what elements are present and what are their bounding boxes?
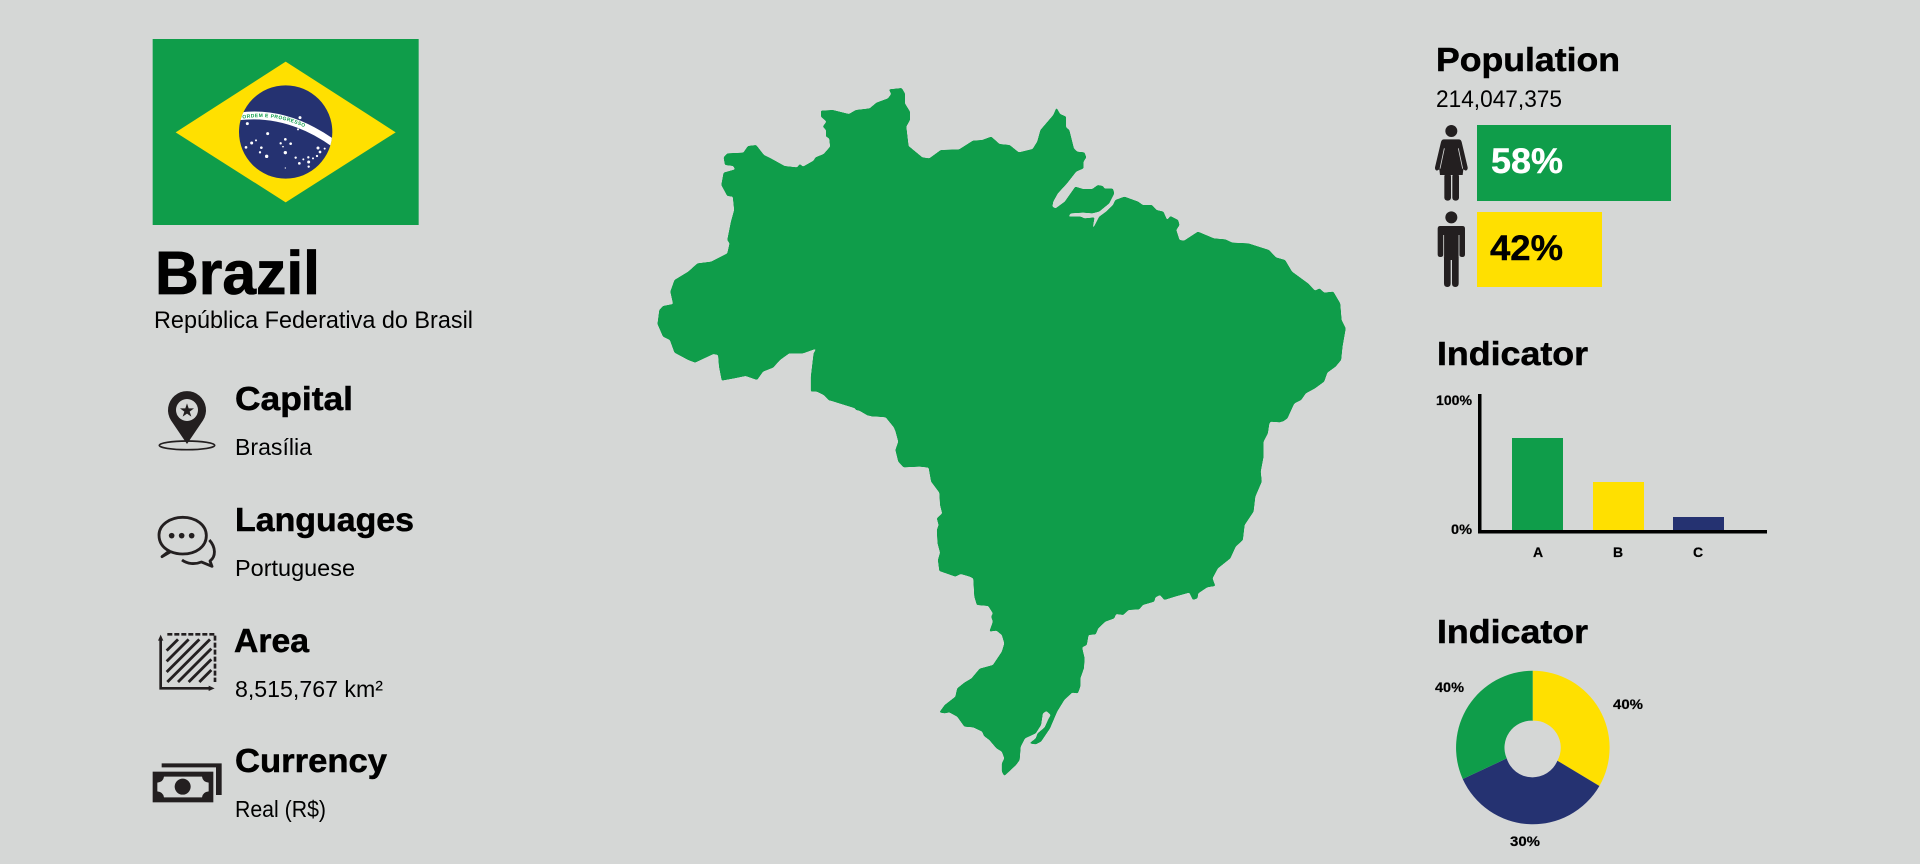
flag of Brazil [152, 39, 419, 225]
area label: Area [234, 622, 310, 659]
bar chart: C [1693, 544, 1703, 560]
donut chart: 40% [1613, 696, 1644, 712]
bar chart [1436, 392, 1767, 560]
area value: 8,515,767 km² [235, 676, 383, 702]
capital label: Capital [235, 380, 353, 417]
panel: bar chart indicator [1436, 335, 1767, 560]
population heading: Population [1436, 41, 1620, 78]
capital value: Brasília [235, 434, 312, 460]
icon: map pin [159, 391, 215, 450]
panel: donut chart indicator [1435, 613, 1644, 849]
population value: 214,047,375 [1436, 86, 1562, 113]
currency value: Real (R$) [235, 796, 326, 822]
bar: male share: 42% [1490, 229, 1563, 268]
bar: female share: 58% [1491, 142, 1563, 181]
bar chart: 100% [1436, 392, 1473, 408]
panel: country profile [152, 39, 473, 822]
donut chart: 30% [1510, 833, 1541, 849]
bar: female share [1477, 125, 1671, 201]
flag of Brazil: ORDEM E PROGRESSO [242, 114, 305, 127]
currency label: Currency [235, 742, 388, 779]
bar chart: A [1533, 544, 1543, 560]
icon: male figure [1438, 211, 1465, 287]
bar chart: B [1613, 544, 1623, 560]
bar chart: 0% [1451, 521, 1473, 537]
donut chart heading: Indicator [1437, 613, 1588, 650]
subtitle: República Federativa do Brasil [154, 307, 473, 334]
map of Brazil [657, 88, 1346, 776]
icon: area square [158, 634, 215, 691]
icon: female figure [1435, 125, 1468, 201]
languages label: Languages [235, 501, 414, 538]
languages value: Portuguese [235, 555, 355, 581]
bar: male share [1477, 212, 1602, 287]
icon: speech bubbles [159, 517, 214, 566]
title: Brazil [155, 239, 320, 307]
donut chart [1435, 671, 1644, 849]
donut chart: 40% [1435, 679, 1465, 695]
bar chart heading: Indicator [1437, 335, 1588, 372]
icon: banknotes [153, 763, 222, 802]
panel: population [1435, 41, 1671, 287]
